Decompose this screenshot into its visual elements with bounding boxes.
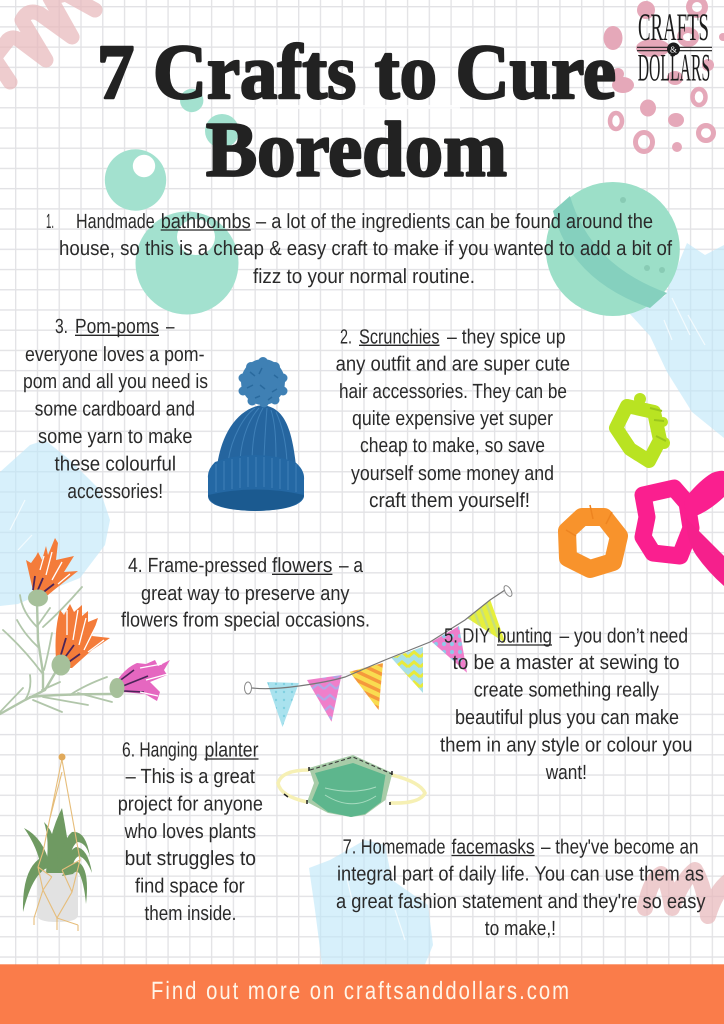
text: 5 bunting: – you don’t need [560, 625, 688, 648]
footer banner [0, 964, 724, 1024]
text: 4 flowers: flowers [272, 554, 332, 577]
text: 4 flowers: – a [339, 554, 364, 577]
title: Boredom [206, 106, 507, 192]
text: 6 planter: them inside. [144, 902, 236, 925]
text: 4 flowers [121, 554, 370, 632]
text: 7 facemasks: facemasks [452, 835, 535, 858]
title [97, 28, 616, 192]
title: 7 Crafts to Cure [97, 28, 616, 115]
text: 1 bathbombs: house, so this is a cheap & easy craft to make if you wanted to add a bit of [59, 237, 672, 260]
text: 6 planter: – This is a great [126, 765, 255, 788]
text: 6 planter: planter [204, 739, 259, 762]
text: 6 planter [118, 739, 263, 925]
text: 6 planter: but struggles to [125, 847, 256, 870]
text: 1 bathbombs: – a lot of the ingredients can be found around the [256, 210, 653, 233]
text: 7 facemasks: to make,! [485, 917, 556, 940]
text: 3 pom-poms: accessories! [67, 480, 163, 503]
blue brush stroke bottom [309, 840, 433, 964]
icon: bunting [244, 584, 514, 727]
text: 6 planter: find space for [135, 875, 245, 898]
text: 2 scrunchies: craft them yourself! [369, 489, 530, 512]
text: 2 scrunchies: Scrunchies [359, 325, 440, 348]
text: 5 bunting: 5. DIY [444, 625, 490, 648]
text: 4 flowers: great way to preserve any [141, 582, 350, 605]
blue brush stroke left [0, 440, 110, 606]
icon: lime scrunchie [616, 393, 670, 461]
text: 3 pom-poms: some yarn to make [38, 425, 192, 448]
text: 2 scrunchies: any outfit and are super cute [336, 353, 570, 376]
text: 7 facemasks [336, 835, 706, 940]
text: 2 scrunchies: yourself some money and [351, 462, 554, 485]
text: 2 scrunchies: 2. [340, 325, 352, 348]
text: 1 bathbombs: bathbombs [161, 210, 251, 233]
text: 7 facemasks: – they've become an [541, 835, 698, 858]
text: 1 bathbombs [46, 210, 672, 288]
text: 5 bunting: want! [545, 761, 587, 784]
icon: bubbles [105, 89, 239, 314]
text: 3 pom-poms: – [166, 315, 175, 338]
pink brush scribble top left [0, 0, 95, 82]
pink brush scribble bottom right [645, 870, 724, 916]
text: 2 scrunchies: quite expensive yet super [352, 407, 553, 430]
text: 1 bathbombs: Handmade [76, 210, 155, 233]
text: 6 planter: project for anyone [118, 793, 263, 816]
icon: pink scrunchie with bow [643, 471, 724, 586]
text: 6 planter: who loves plants [124, 820, 256, 843]
text: 3 pom-poms: pom and all you need is [23, 370, 208, 393]
text: 1 bathbombs: 1. [46, 210, 54, 233]
orange flower middle [56, 604, 110, 668]
text: 6 planter: 6. Hanging [122, 739, 198, 762]
icon: face mask [278, 755, 425, 817]
text: 7 facemasks: 7. Homemade [343, 835, 446, 858]
footer banner: Find out more on craftsanddollars.com [151, 977, 571, 1005]
text: 5 bunting: them in any style or colour you [440, 734, 692, 757]
text: 4 flowers: 4. Frame-pressed [128, 554, 267, 577]
text: 5 bunting: beautiful plus you can make [455, 706, 679, 729]
text: 2 scrunchies: – they spice up [447, 325, 566, 348]
icon: hanging planter [23, 754, 92, 931]
text: 2 scrunchies: cheap to make, so save [360, 434, 545, 457]
icon: bath bomb [546, 182, 680, 316]
orange flower top [26, 538, 78, 600]
text: 1 bathbombs: fizz to your normal routine. [253, 265, 475, 288]
pink dots decoration [604, 0, 724, 152]
text: 3 pom-poms: 3. [55, 315, 68, 338]
text: 3 pom-poms: some cardboard and [35, 398, 195, 421]
text: 5 bunting: create something really [474, 679, 660, 702]
text: 5 bunting [440, 625, 692, 784]
text: 5 bunting: to be a master at sewing to [452, 651, 680, 674]
blue brush stroke right [630, 243, 724, 438]
text: 3 pom-poms: these colourful [54, 453, 176, 476]
text: 2 scrunchies: hair accessories. They can be [339, 380, 567, 403]
stems [0, 587, 112, 714]
icon: blue bobble hat [208, 357, 304, 511]
text: 2 scrunchies [336, 325, 570, 512]
logo: Crafts & Dollars [637, 6, 712, 90]
pink flower [116, 660, 170, 701]
text: 3 pom-poms: everyone loves a pom- [25, 343, 204, 366]
text: 3 pom-poms [23, 315, 208, 503]
text: 4 flowers: flowers from special occasions. [121, 609, 370, 632]
icon: orange scrunchie [566, 505, 619, 569]
text: 5 bunting: bunting [497, 625, 552, 648]
logo: Crafts & Dollars: & [670, 44, 677, 54]
icon: flowers [0, 538, 170, 714]
text: 3 pom-poms: Pom-poms [75, 315, 159, 338]
